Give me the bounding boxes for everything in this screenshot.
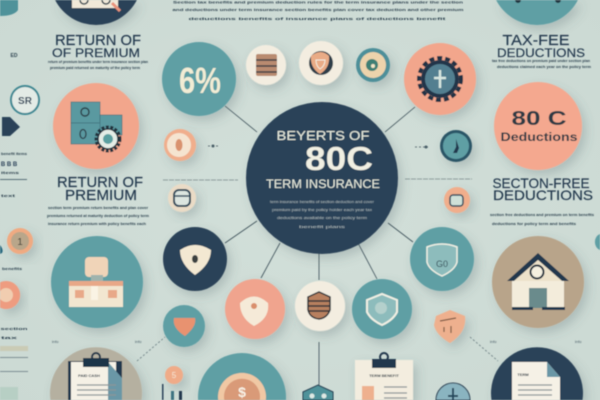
panel: left edge items: ED (11, 53, 18, 59)
icon: teal shield face (352, 279, 412, 339)
central body text: deductions available on the policy term (277, 216, 367, 220)
central body text: premium paid by the policy holder each year tax (272, 208, 372, 212)
icon: left coins: benefits (2, 267, 22, 271)
icon: small seal at centre left (168, 184, 196, 212)
heading: tax-free deductions top (492, 32, 592, 69)
icon: teal shield G: G0 (436, 259, 448, 269)
heading: return of premium lower (47, 174, 150, 226)
icon: 6% badge (162, 42, 236, 116)
icon: 6% badge: 6% (179, 60, 221, 101)
panel: top right icon (496, 0, 578, 25)
central number: 80C (305, 140, 373, 177)
connector lines (137, 106, 498, 400)
icon: teal seal (356, 48, 390, 82)
panel: central hub (246, 102, 398, 254)
panel: left edge items: text (1, 194, 16, 198)
heading: tax-free deductions top: DEDUCTIONS (497, 46, 585, 60)
heading: return of premium lower: RETURN OF (57, 174, 143, 191)
icon: shield badge (299, 41, 343, 85)
panel: clipboard left: PAID CASH (78, 373, 100, 378)
heading: section-free deductions: section free deductions and premium on term benefits (490, 213, 594, 217)
small separators and labels (52, 144, 582, 344)
heading: return of premium top (48, 32, 149, 70)
icon: left coins (0, 228, 33, 400)
icon: bank building (51, 236, 143, 328)
icon: coral gear (404, 43, 476, 115)
heading: return of premium lower: PREMIUM (65, 187, 137, 204)
heading: section-free deductions (490, 175, 594, 226)
icon: right edge badge (595, 234, 600, 250)
icon: dollar coin (198, 353, 286, 400)
central body text: term insurance benefits of section deduction and cover (270, 200, 375, 204)
panel: left edge items (0, 0, 27, 198)
icon: coral money and gear (53, 83, 139, 169)
top intro text (172, 0, 465, 21)
heading: section-free deductions: SECTON-FREE (492, 175, 590, 191)
panel: document right (491, 347, 583, 400)
icon: small coral dot (165, 366, 183, 384)
panel: clipboard right (355, 353, 413, 400)
panel: 80C deductions badge (494, 82, 582, 170)
panel: clipboard right: TERM BENEFIT (369, 373, 399, 378)
icon: SR seal (11, 86, 39, 114)
central body text (270, 200, 375, 229)
icon: left coins: section (0, 327, 29, 331)
heading: section-free deductions: DEDUCTIONS (493, 187, 593, 203)
icon: SR seal: SR (18, 96, 33, 107)
icon: right teal badge (440, 130, 472, 162)
small separators and labels: info (575, 339, 582, 344)
panel: top left icon (55, 0, 137, 25)
icon: small coral top tag (444, 187, 470, 213)
icon: house (492, 236, 584, 328)
panel: left edge items: items (1, 171, 19, 175)
heading: tax-free deductions top: TAX-FEE (502, 32, 570, 49)
icon: stacked books (246, 45, 286, 85)
icon: coral flower shield (225, 279, 285, 339)
icon: bottom shield (303, 385, 333, 400)
heading: return of premium lower: premiums returned at maturity deduction of policy term (47, 214, 150, 218)
heading: section-free deductions: deductions for policy term and benefits (492, 222, 576, 226)
icon: left coins: 1 (17, 237, 23, 248)
panel: document right: TERM (517, 372, 529, 377)
heading: return of premium top: OF PREMIUM (52, 46, 140, 60)
panel: 80C deductions badge: Deductions (500, 130, 578, 144)
small separators and labels: info (135, 339, 142, 344)
top intro text: deductions benefits of insurance plans of deductions benefit (188, 17, 447, 21)
icon: striped shield (295, 281, 345, 331)
panel: small bars (162, 384, 182, 400)
top intro text: and deductions under term insurance section benefits plan cover tax deduction and other premium (172, 8, 465, 12)
icon: small coral dot: 5 (172, 371, 177, 380)
heading: tax-free deductions top: deductions claimed each year on the policy term (497, 65, 592, 69)
icon: small teal heart (163, 305, 205, 347)
central subtitle: TERM INSURANCE (266, 177, 380, 191)
icon: coral tag (434, 310, 465, 343)
icon: small coral coin (164, 129, 196, 161)
top intro text: Section tax benefits and premium deduction rules for the term insurance plans under the section (173, 0, 464, 4)
heading: return of premium top: RETURN OF (55, 32, 141, 49)
icon: bottom blue seal (436, 383, 470, 400)
central title: BEYERTS OF (276, 128, 370, 143)
icon: teal shield G (410, 227, 474, 291)
heading: return of premium top: premium paid returned on maturity of the policy term (50, 66, 141, 70)
small separators and labels: info (52, 339, 59, 344)
panel: clipboard left (50, 347, 142, 400)
heading: return of premium lower: section term premium return benefits and plan cover (48, 206, 149, 210)
icon: left coins: tax (1, 336, 20, 340)
icon: dollar coin: $ (238, 384, 246, 400)
panel: 80C deductions badge: 80 C (512, 108, 566, 130)
heading: tax-free deductions top: tax free deductions on premium paid under section plan (492, 59, 591, 63)
heading: return of premium lower: insurance return premium with policy benefits each (48, 222, 147, 226)
panel: left edge items: B B B (1, 162, 18, 168)
central body text: benefit plans (299, 225, 345, 229)
heading: return of premium top: return of premium benefits under term insurance section plan (48, 60, 149, 64)
panel: left edge items: benefit items (1, 152, 27, 156)
icon: dark shield (163, 227, 227, 291)
small separators and labels: info (490, 339, 497, 344)
